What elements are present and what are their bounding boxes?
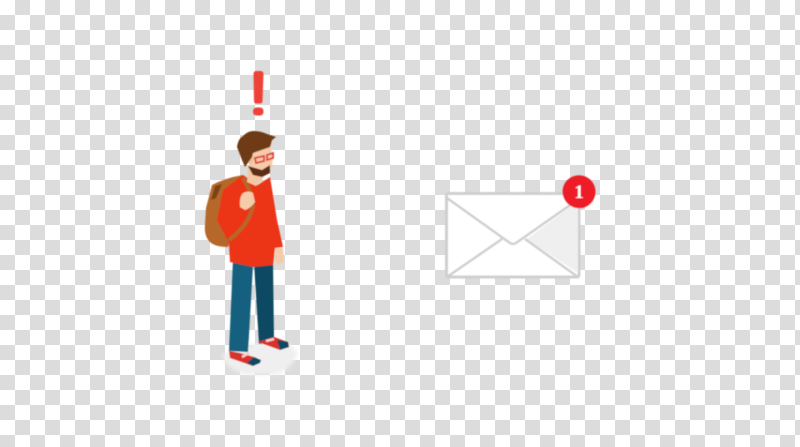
neck: [247, 168, 266, 186]
backpack strap: [229, 178, 253, 240]
icon: exclamation mark: [253, 71, 264, 116]
beard: [248, 165, 270, 177]
right leg: [254, 262, 274, 344]
envelope flap lines: [447, 198, 578, 277]
person with backpack: [205, 131, 298, 375]
raised hand: [240, 192, 255, 210]
envelope shaded side: [527, 207, 578, 273]
lower hand: [275, 248, 284, 265]
notification badge: 1: [574, 182, 584, 203]
notification badge: [562, 175, 596, 208]
envelope with notification: [446, 175, 596, 277]
floor shadow: [222, 343, 298, 375]
envelope body: [446, 194, 579, 277]
ear: [246, 154, 254, 164]
hair: [237, 131, 276, 167]
left shoe: [229, 351, 261, 366]
left leg: [229, 260, 253, 352]
backpack: [205, 175, 246, 247]
right shoe: [258, 337, 289, 350]
red shirt: [217, 175, 283, 267]
glasses: [255, 153, 273, 163]
face: [249, 146, 273, 172]
